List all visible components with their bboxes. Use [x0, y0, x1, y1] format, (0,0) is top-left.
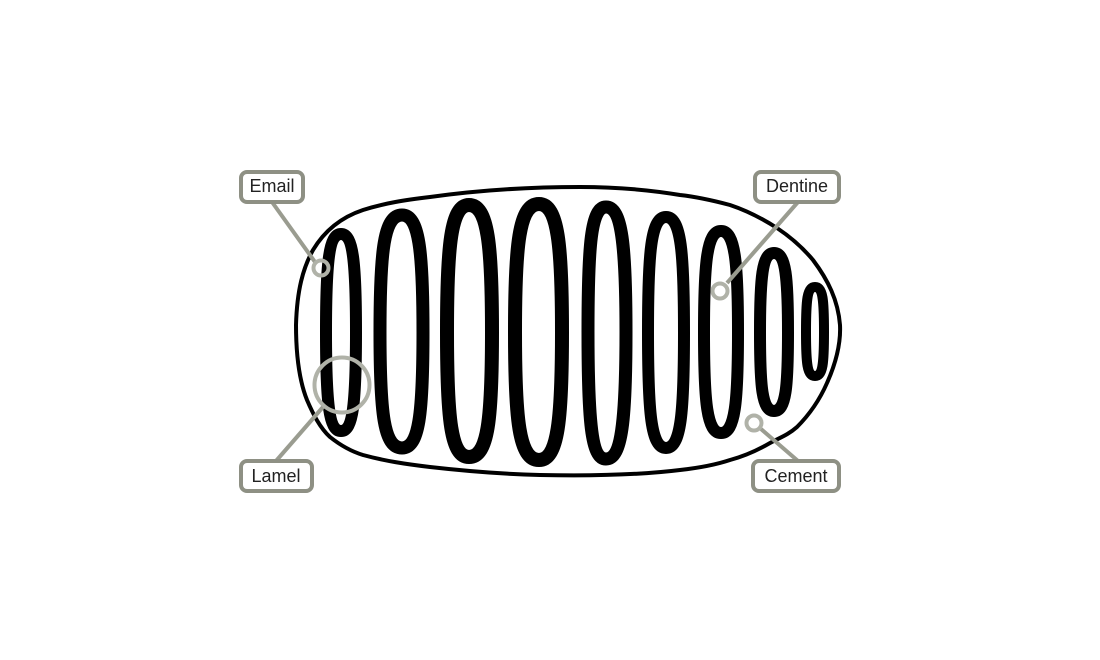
callout: Lamel	[241, 358, 370, 491]
lamella 6	[648, 217, 684, 448]
lamella 4	[515, 204, 562, 460]
lamella 9	[806, 287, 824, 376]
lamella 2	[380, 215, 423, 448]
callout: Dentine	[712, 172, 839, 298]
callout: Cement	[746, 416, 839, 491]
callout: Lamel: Lamel	[251, 466, 301, 486]
callout: Cement: Cement	[764, 466, 828, 486]
tooth outline	[296, 187, 840, 475]
lamella 3	[447, 205, 492, 457]
lamellae	[326, 204, 824, 460]
lamella 8	[760, 253, 788, 411]
lamella 5	[588, 207, 626, 459]
lamella 7	[704, 231, 738, 433]
callout: Email	[241, 172, 328, 276]
callout: Dentine: Dentine	[766, 176, 828, 196]
lamella 1	[326, 234, 356, 431]
callout: Email: Email	[249, 176, 295, 196]
